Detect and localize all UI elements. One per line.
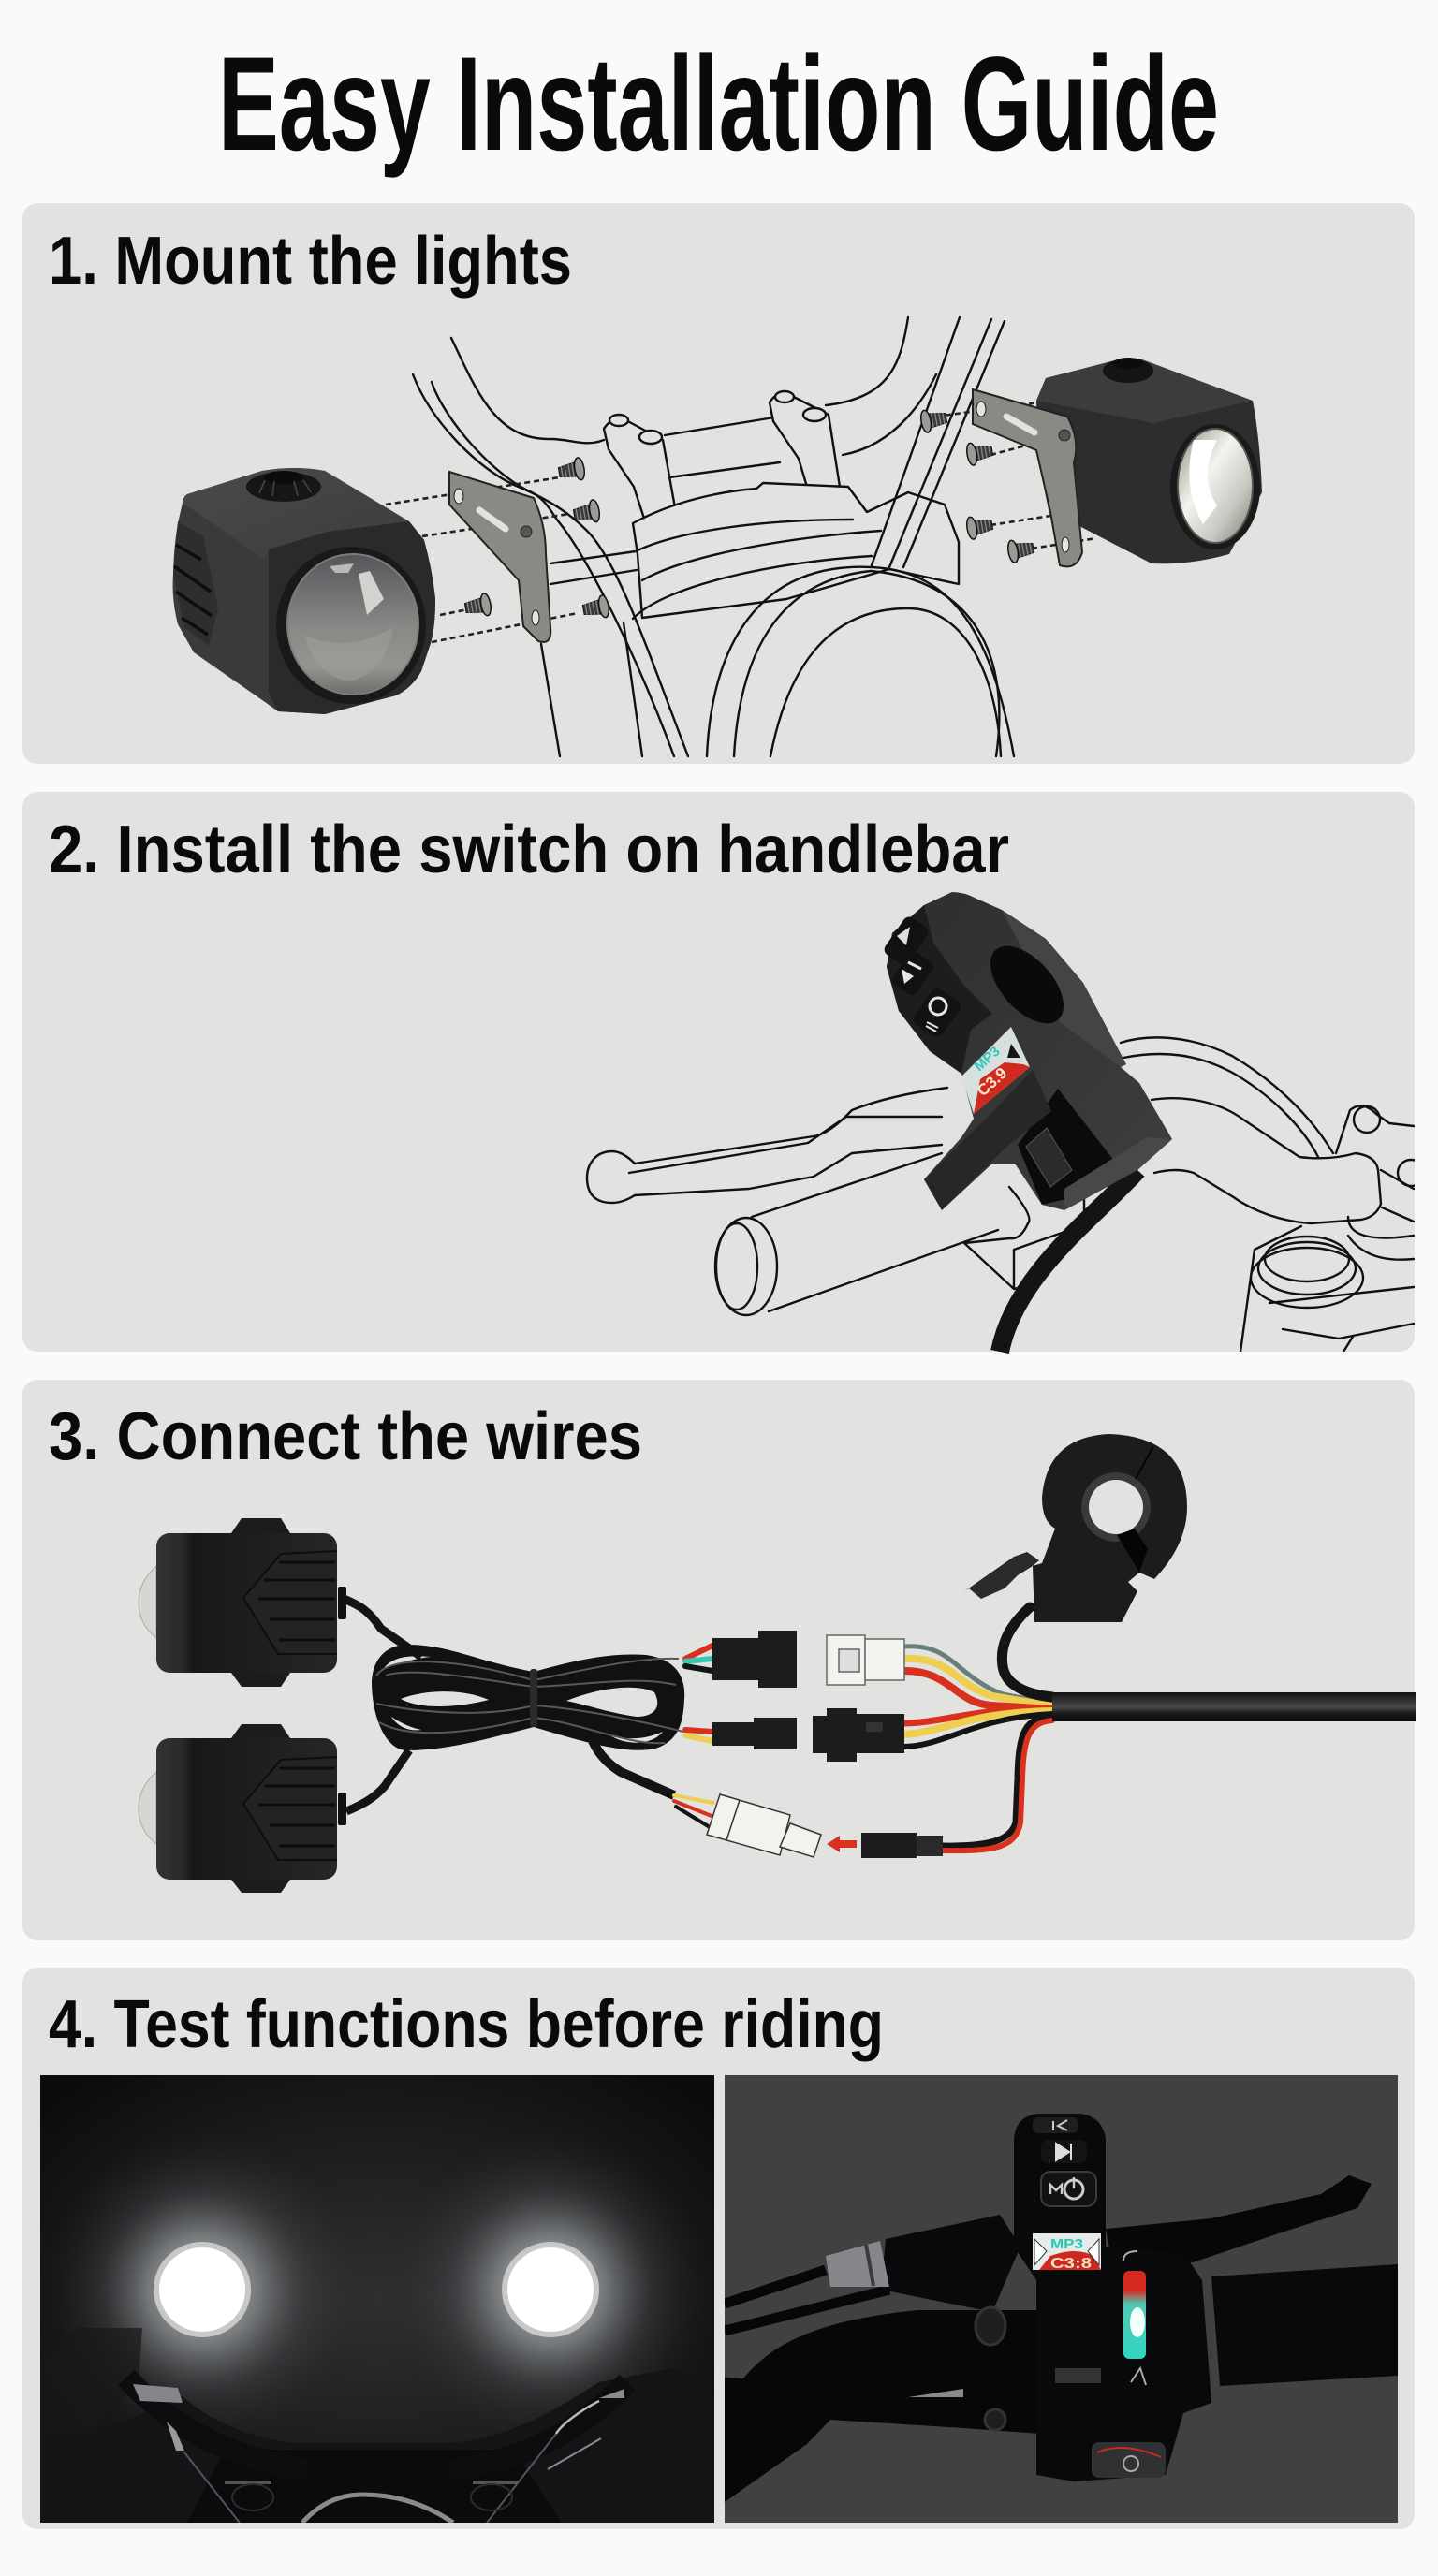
connector: upper white [827,1635,904,1685]
connector: upper black [712,1631,797,1688]
switch: display: MP3 [971,1044,1004,1075]
panel: step 3 connect the wires [22,1380,1416,1940]
brake cables [725,2270,889,2331]
switch: cable [1000,1170,1137,1352]
wires: connector leads [674,1607,1052,1851]
line art: handlebar and lever [587,1037,1424,1352]
switch: display [961,1027,1030,1114]
display [1033,2233,1101,2272]
throttle grip [1211,2264,1398,2386]
connector: small black [861,1833,943,1858]
light: right [1036,358,1262,564]
panel: step 4 test functions [22,1968,1415,2529]
switch: display: C3.9 [974,1064,1010,1100]
line art: motorcycle front [413,317,1014,756]
wiring loom [344,1599,684,1811]
switch: handlebar control [882,892,1172,1210]
barrel adjuster [826,2215,1020,2312]
glow: right light [433,2165,676,2413]
photo: switch lit [725,2075,1398,2523]
right mounting bracket [973,389,1082,566]
handlebar [725,2310,1039,2502]
arrow: red [827,1836,857,1852]
kill switch button [1092,2442,1166,2478]
light: left [173,468,435,714]
screws [463,407,1035,621]
heading: step 2: 2. Install the switch on handlebar [49,812,1009,887]
dashed alignment lines [386,402,1096,642]
heading: step 1: 1. Mount the lights [49,224,572,299]
light: top [139,1518,346,1687]
left mounting bracket [449,472,550,642]
heading: step 3: 3. Connect the wires [49,1399,642,1474]
switch: button icons [897,927,946,1032]
switch housing [908,2114,1211,2481]
LED bar [1123,2271,1146,2359]
connector: white angled [707,1794,821,1857]
light: bottom [139,1724,346,1893]
handlebar silhouette [40,2328,714,2523]
switch: clamp [964,1434,1187,1622]
heading: step 4: 4. Test functions before riding [49,1987,884,2062]
display: C3:8 [1050,2256,1092,2272]
main cable [1052,1692,1416,1721]
brake lever [1106,2175,1372,2262]
connector: lower black plug [712,1718,797,1749]
photo: lights on at night [40,2075,714,2523]
connector: lower black socket [813,1708,904,1762]
display: MP3 [1050,2236,1083,2252]
glow: left light [77,2165,320,2413]
panel: step 1 mount the lights [22,203,1415,764]
panel: step 2 install the switch [22,792,1424,1352]
